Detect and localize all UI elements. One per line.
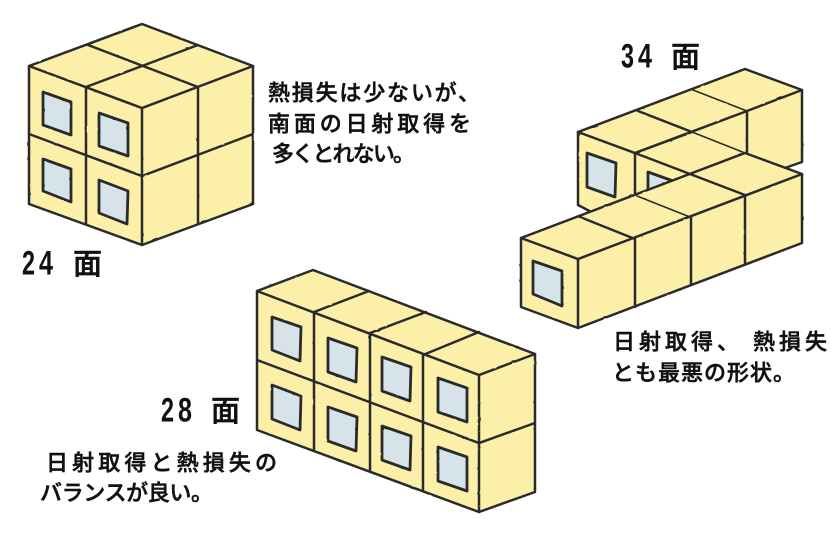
label: 28 faces bbox=[161, 392, 240, 430]
label: 28 faces: 2 bbox=[161, 392, 174, 430]
label: 24 faces: 2 bbox=[22, 244, 35, 282]
label: 34 faces: 3 bbox=[621, 38, 634, 76]
diagram: 4x2 wall block with 28 faces bbox=[257, 270, 535, 512]
caption: block 24 note: 多くとれない。 bbox=[272, 142, 415, 166]
caption: block 34 note: とも最悪の形状。 bbox=[612, 360, 795, 386]
label: 24 faces bbox=[22, 244, 102, 282]
caption: block 28 note: バランスが良い。 bbox=[40, 480, 213, 506]
label: 24 faces: 面 bbox=[73, 249, 102, 281]
label: 28 faces: 8 bbox=[178, 392, 192, 430]
label: 34 faces: 4 bbox=[638, 38, 652, 76]
diagram: staggered block with 34 faces bbox=[521, 69, 802, 328]
label: 28 faces: 面 bbox=[211, 396, 240, 428]
label: 24 faces: 4 bbox=[39, 244, 53, 282]
label: 34 faces bbox=[621, 38, 700, 76]
caption: block 34 note: 日射取得、 熱損失 bbox=[613, 330, 827, 354]
caption: block 24 note bbox=[268, 80, 480, 166]
caption: block 34 note bbox=[612, 330, 827, 386]
caption: block 28 note: 日射取得と熱損失の bbox=[46, 450, 277, 476]
caption: block 24 note: 南面の日射取得を bbox=[268, 112, 471, 136]
label: 34 faces: 面 bbox=[671, 42, 700, 74]
caption: block 28 note bbox=[40, 450, 277, 506]
caption: block 24 note: 熱損失は少ないが、 bbox=[268, 80, 480, 106]
diagram: 2x2 block with 24 faces bbox=[29, 24, 253, 245]
